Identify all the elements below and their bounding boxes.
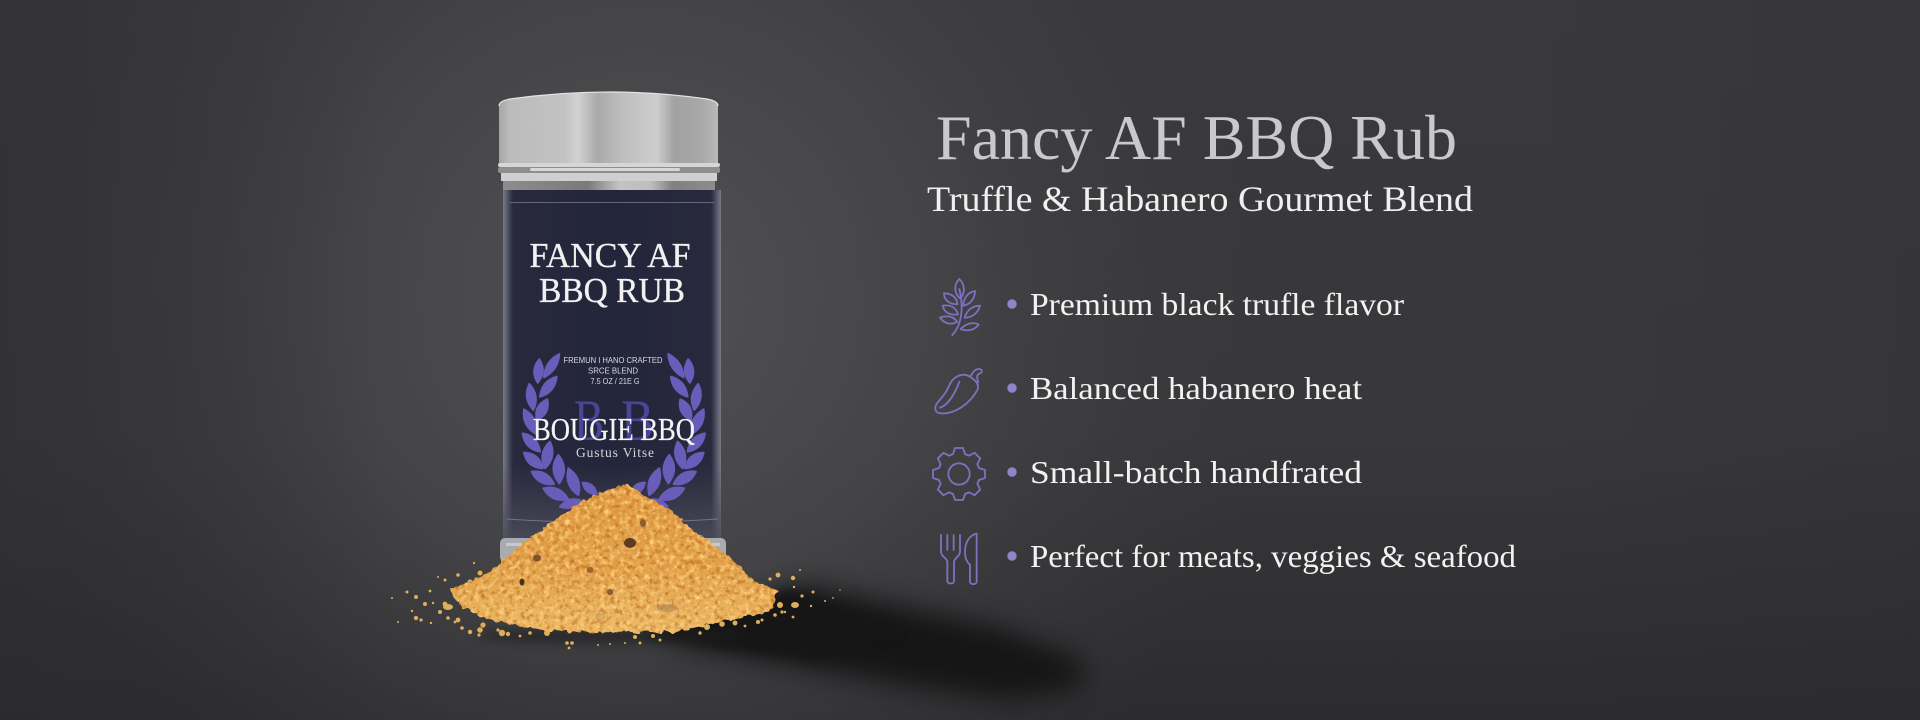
powder mound bbox=[450, 484, 778, 633]
feature list bbox=[933, 279, 1516, 584]
BB monogram: B bbox=[621, 388, 654, 453]
feature: versatile use bbox=[941, 534, 1516, 584]
label small print: 7.5 OZ / 21E G bbox=[590, 376, 640, 386]
icon: chili pepper bbox=[935, 369, 982, 413]
label small print: FREMUN I HANO CRAFTED bbox=[564, 355, 662, 365]
title: Fancy AF BBQ Rub bbox=[936, 103, 1457, 173]
laurel wreath bbox=[523, 354, 705, 508]
icon: herb sprig bbox=[940, 279, 980, 335]
subtitle: Truffle & Habanero Gourmet Blend bbox=[927, 179, 1473, 219]
product tin bbox=[498, 92, 726, 562]
bullet bbox=[1007, 551, 1017, 561]
spice pile bbox=[391, 484, 841, 649]
label small print: SRCE BLEND bbox=[588, 366, 638, 376]
icon: fork and knife bbox=[941, 534, 977, 584]
brand name: BOUGIE BBQ bbox=[533, 411, 695, 447]
bullet bbox=[1007, 299, 1017, 309]
tin base ring bbox=[500, 538, 726, 562]
tin lid bbox=[498, 92, 720, 190]
feature text: Balanced habanero heat bbox=[1030, 370, 1362, 406]
product name on label: FANCY AF bbox=[530, 236, 690, 275]
feature: small batch bbox=[933, 448, 1362, 500]
loose crumbs bbox=[391, 562, 841, 649]
feature text: Small-batch handfrated bbox=[1030, 454, 1362, 490]
product name on label bbox=[530, 236, 690, 310]
icon: gear bbox=[933, 448, 985, 500]
bullet bbox=[1007, 467, 1017, 477]
bullet bbox=[1007, 383, 1017, 393]
brand tagline: Gustus Vitse bbox=[576, 445, 654, 460]
feature text: Perfect for meats, veggies & seafood bbox=[1030, 538, 1516, 574]
dark spice flecks bbox=[520, 519, 677, 621]
feature: habanero heat bbox=[935, 369, 1362, 413]
label small print bbox=[564, 355, 662, 386]
BB monogram: B bbox=[574, 388, 604, 453]
feature: premium truffle bbox=[940, 279, 1404, 335]
cast shadow bbox=[475, 584, 1082, 700]
product name on label: BBQ RUB bbox=[539, 271, 685, 310]
BB monogram bbox=[574, 388, 654, 453]
feature text: Premium black trufle flavor bbox=[1030, 286, 1404, 322]
tin label body bbox=[503, 190, 721, 542]
